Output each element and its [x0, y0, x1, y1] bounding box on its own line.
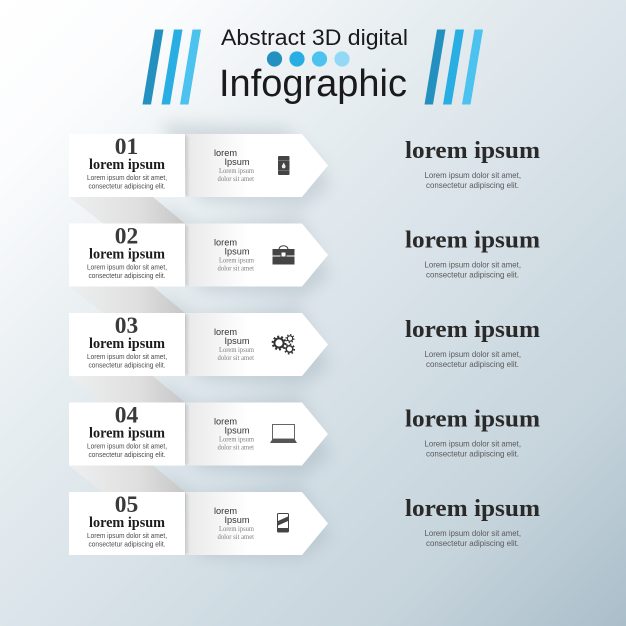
text block: right 5: lorem ipsum — [405, 495, 540, 522]
arrow text: lorem — [214, 238, 237, 248]
text block: right 2: lorem ipsum — [405, 226, 540, 254]
panel: step 5 — [69, 492, 328, 555]
panel: step 4 — [69, 402, 328, 492]
arrow text — [214, 238, 254, 272]
white box — [69, 313, 188, 376]
white box — [69, 224, 188, 286]
title line 2: Infographic — [219, 63, 407, 105]
description: consectetur adipiscing elit. — [88, 451, 166, 459]
soft shadows behind steps — [160, 122, 330, 558]
arrow text: Lorem ipsum — [219, 525, 254, 533]
arrow text: Lorem ipsum — [219, 256, 254, 264]
arrow text: dolor sit amet — [218, 264, 254, 272]
text block: right 3 — [405, 316, 540, 369]
title block — [142, 25, 483, 105]
icon: oil barrel — [278, 156, 290, 175]
description — [87, 174, 167, 190]
arrow text: dolor sit amet — [218, 354, 254, 362]
arrow text: Lorem ipsum — [219, 167, 254, 175]
text block: right 3: Lorem ipsum dolor sit amet, — [424, 350, 521, 359]
description: consectetur adipiscing elit. — [88, 362, 166, 370]
icon: smartphone — [278, 514, 288, 532]
arrow panel — [186, 492, 328, 555]
panel: step 3 — [69, 313, 328, 402]
arrow text: lorem — [214, 506, 237, 516]
arrow text: lorem — [214, 327, 237, 337]
arrow text: dolor sit amet — [218, 175, 254, 183]
arrow text — [214, 327, 254, 362]
heading: lorem ipsum — [89, 157, 165, 173]
decorative bars right — [424, 30, 483, 104]
arrow text: Lorem ipsum — [219, 436, 254, 444]
fold ribbon — [69, 286, 185, 313]
text block: right 4 — [405, 406, 540, 458]
text block: right 2 — [405, 226, 540, 280]
arrow text: lorem — [214, 148, 237, 158]
text block: right 1: lorem ipsum — [405, 137, 540, 164]
text block: right 3: lorem ipsum — [405, 316, 540, 343]
arrow text: Ipsum — [224, 246, 250, 256]
number: 04 — [115, 402, 138, 428]
text block: right 5: Lorem ipsum dolor sit amet, — [424, 529, 521, 538]
text block: right 4: lorem ipsum — [405, 406, 540, 432]
text block: right 1: consectetur adipiscing elit. — [426, 181, 519, 190]
arrow text — [214, 506, 254, 541]
decorative bars left — [142, 30, 201, 104]
arrow panel — [186, 224, 328, 286]
panel: step 2 — [69, 224, 328, 313]
white box — [69, 492, 188, 555]
arrow panel — [186, 402, 328, 466]
panel: step 1 — [69, 134, 328, 224]
number: 03 — [115, 313, 138, 339]
arrow text — [214, 148, 254, 183]
arrow text: lorem — [214, 416, 237, 426]
text block: right 1 — [405, 137, 540, 190]
description: consectetur adipiscing elit. — [88, 272, 166, 280]
icon: gears — [273, 335, 294, 354]
arrow text: Ipsum — [224, 157, 250, 167]
description: consectetur adipiscing elit. — [88, 540, 166, 548]
fold ribbon — [69, 376, 185, 402]
description: Lorem ipsum dolor sit amet, — [87, 353, 167, 361]
icon: laptop — [270, 424, 297, 443]
arrow text: Ipsum — [224, 336, 250, 346]
description: Lorem ipsum dolor sit amet, — [87, 174, 167, 182]
text block: right 5 — [405, 495, 540, 548]
white box — [69, 134, 188, 197]
heading: lorem ipsum — [89, 336, 165, 352]
text block: right 1: Lorem ipsum dolor sit amet, — [424, 171, 521, 180]
number: 05 — [115, 492, 138, 518]
arrow text — [214, 416, 254, 452]
text block: right 3: consectetur adipiscing elit. — [426, 360, 519, 369]
description: consectetur adipiscing elit. — [88, 182, 166, 190]
fold ribbon — [69, 466, 185, 492]
text block: right 2: consectetur adipiscing elit. — [426, 270, 519, 280]
text block: right 2: Lorem ipsum dolor sit amet, — [424, 260, 521, 270]
number: 01 — [115, 134, 138, 160]
description — [87, 353, 167, 370]
arrow text: Ipsum — [224, 426, 250, 436]
arrow text: dolor sit amet — [218, 444, 254, 452]
text block: right 5: consectetur adipiscing elit. — [426, 539, 519, 548]
description: Lorem ipsum dolor sit amet, — [87, 442, 167, 450]
white box — [69, 402, 188, 466]
description — [87, 532, 167, 548]
arrow text: Lorem ipsum — [219, 346, 254, 354]
arrow panel — [186, 313, 328, 376]
number: 02 — [115, 224, 138, 250]
arrow text: dolor sit amet — [218, 533, 254, 541]
dots — [267, 51, 350, 67]
heading: lorem ipsum — [89, 426, 165, 442]
fold ribbon — [69, 197, 185, 224]
heading: lorem ipsum — [89, 246, 165, 262]
title line 1: Abstract 3D digital — [221, 25, 408, 50]
icon: briefcase — [272, 246, 294, 264]
description: Lorem ipsum dolor sit amet, — [87, 264, 167, 272]
arrow panel — [186, 134, 328, 197]
description — [87, 264, 167, 280]
text block: right 4: Lorem ipsum dolor sit amet, — [424, 440, 521, 448]
heading: lorem ipsum — [89, 515, 165, 531]
description — [87, 442, 167, 459]
text block: right 4: consectetur adipiscing elit. — [426, 450, 519, 458]
description: Lorem ipsum dolor sit amet, — [87, 532, 167, 540]
arrow text: Ipsum — [224, 515, 250, 525]
